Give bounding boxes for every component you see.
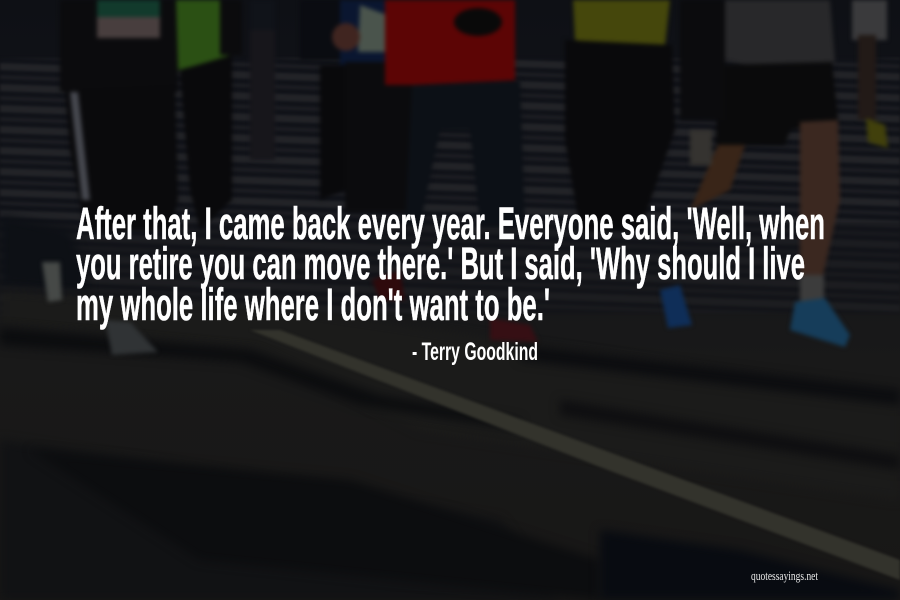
runner: red shirt (385, 0, 525, 225)
attribution: - Terry Goodkind (412, 338, 538, 366)
runner: background legs (250, 0, 340, 160)
watermark: quotessayings.net (751, 568, 818, 583)
runner: yellow vest (565, 0, 675, 230)
runners (42, 0, 888, 355)
runner: grey shirt and shorts (680, 0, 840, 315)
quote text: my whole life where I don't want to be.' (76, 279, 550, 330)
runner: neon vest (176, 0, 242, 230)
road line (250, 330, 900, 580)
shoes (42, 262, 850, 355)
runner: far right (852, 0, 888, 148)
runner: blue shirt with bib 941 (320, 0, 420, 212)
quote text (76, 198, 825, 330)
runner: black jacket with bib 1041 (60, 0, 178, 230)
